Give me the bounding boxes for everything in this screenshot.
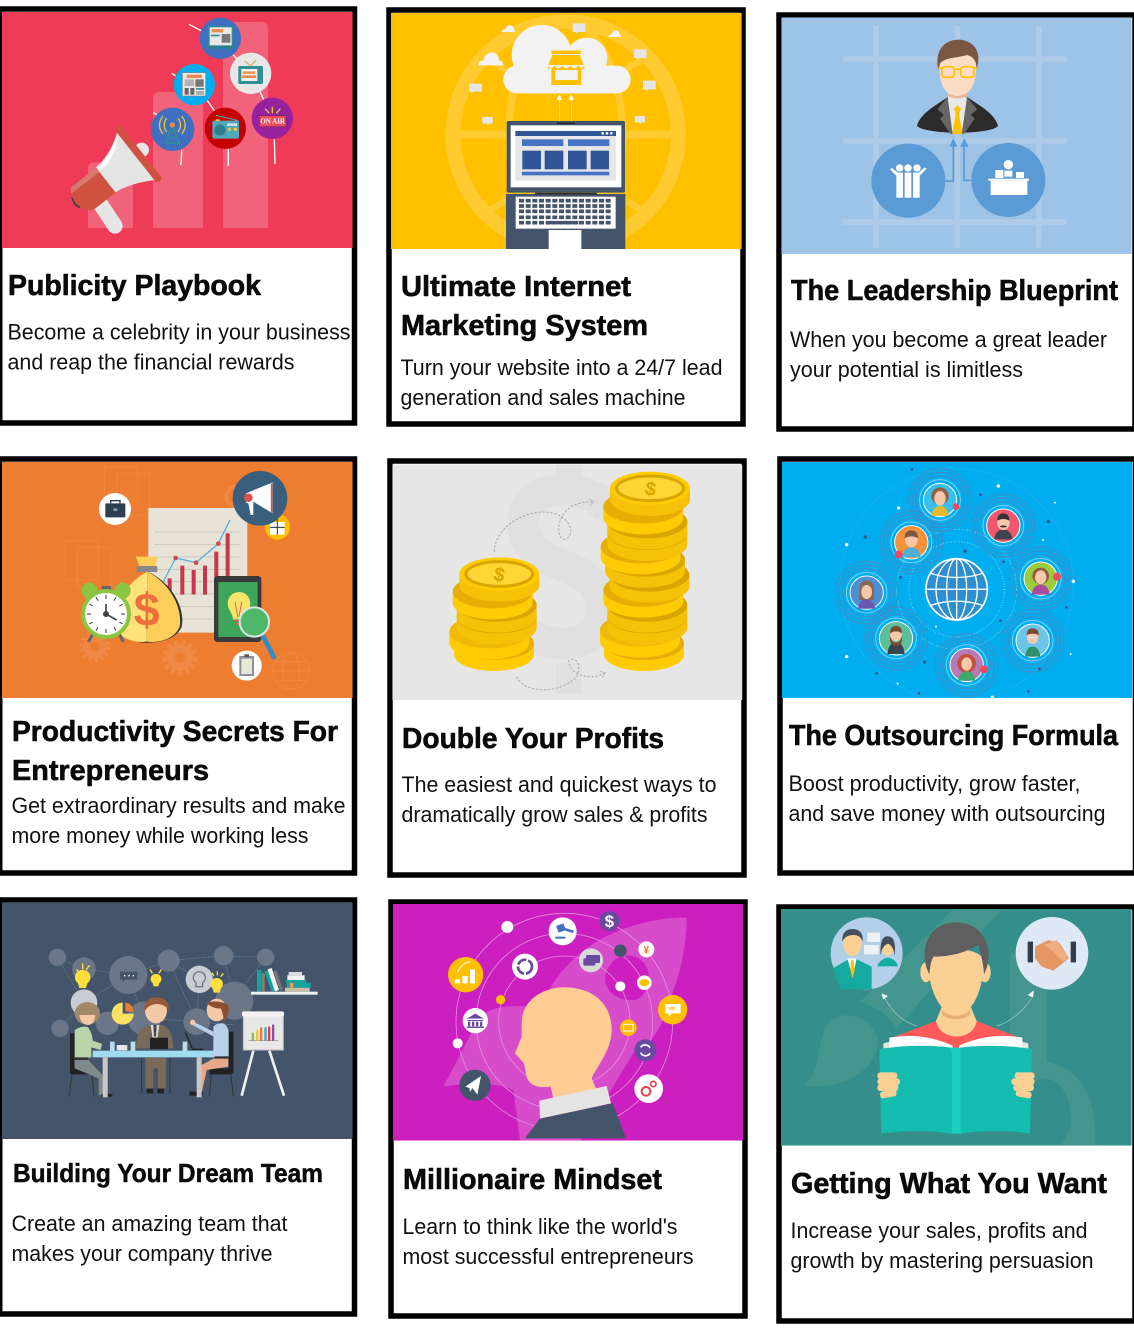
description: your potential is limitless: [790, 357, 1023, 382]
heading: Double Your Profits: [402, 723, 664, 755]
heading: Getting What You Want: [791, 1168, 1107, 1200]
card frame: [780, 459, 1134, 873]
heading: Building Your Dream Team: [13, 1158, 323, 1188]
description: and save money with outsourcing: [788, 801, 1106, 826]
card: Productivity Secrets For Entrepreneurs: [0, 459, 354, 873]
heading: The Outsourcing Formula: [789, 720, 1119, 752]
description: The easiest and quickest ways to: [402, 772, 716, 797]
card: The Outsourcing Formula: [780, 459, 1134, 873]
illustration: laptop and cloud store: [391, 13, 742, 249]
card: Publicity Playbook: [0, 9, 354, 423]
illustration: head with orbiting icons: [393, 904, 743, 1141]
card frame: [390, 461, 744, 875]
illustration: money bag, clock and chart: [2, 462, 353, 698]
card frame: [0, 459, 354, 873]
card frame: [391, 902, 745, 1316]
card frame: [0, 900, 354, 1314]
description: generation and sales machine: [400, 385, 686, 410]
description: Turn your website into a 24/7 lead: [400, 355, 722, 380]
card: Millionaire Mindset: [391, 902, 745, 1316]
heading: Productivity Secrets For: [12, 716, 338, 748]
card: The Leadership Blueprint: [779, 15, 1134, 429]
card: Ultimate Internet Marketing System: [389, 10, 743, 424]
illustration: money bag, clock and chart: $: [134, 584, 160, 636]
description: growth by mastering persuasion: [790, 1248, 1094, 1273]
description: more money while working less: [12, 823, 308, 848]
illustration: head with orbiting icons: ¥: [643, 944, 649, 956]
description: When you become a great leader: [790, 327, 1107, 352]
illustration: megaphone and media icons: [2, 12, 353, 248]
card frame: [779, 15, 1134, 429]
illustration: team at a table: [2, 903, 353, 1139]
card frame: [389, 10, 743, 424]
illustration: reader with book: [781, 909, 1132, 1146]
illustration: coin stacks: $: [492, 564, 507, 587]
description: Boost productivity, grow faster,: [788, 771, 1080, 796]
illustration: megaphone and media icons: ON AIR: [260, 118, 286, 126]
description: makes your company thrive: [12, 1241, 272, 1266]
card frame: [0, 9, 354, 423]
illustration: global network of people: [782, 462, 1132, 702]
heading: Millionaire Mindset: [403, 1164, 662, 1196]
heading: Ultimate Internet: [401, 271, 631, 303]
description: and reap the financial rewards: [8, 350, 294, 374]
illustration: head with orbiting icons: $: [605, 912, 615, 931]
description: dramatically grow sales & profits: [402, 802, 708, 827]
illustration: leader with team and desk: [781, 17, 1132, 254]
description: Create an amazing team that: [12, 1211, 288, 1236]
heading: Publicity Playbook: [8, 270, 262, 302]
heading: Entrepreneurs: [12, 755, 209, 787]
heading: The Leadership Blueprint: [791, 275, 1118, 307]
description: Become a celebrity in your business: [8, 320, 350, 344]
heading: Marketing System: [401, 310, 648, 342]
card: Getting What You Want: [779, 907, 1134, 1321]
description: Increase your sales, profits and: [790, 1218, 1088, 1243]
description: most successful entrepreneurs: [402, 1244, 694, 1269]
illustration: coin stacks: [392, 464, 742, 700]
illustration: coin stacks: $: [643, 478, 658, 501]
description: Get extraordinary results and make: [12, 793, 346, 818]
description: Learn to think like the world's: [402, 1214, 678, 1239]
card: Double Your Profits: [390, 461, 744, 875]
card: Building Your Dream Team: [0, 900, 354, 1314]
card frame: [779, 907, 1134, 1321]
